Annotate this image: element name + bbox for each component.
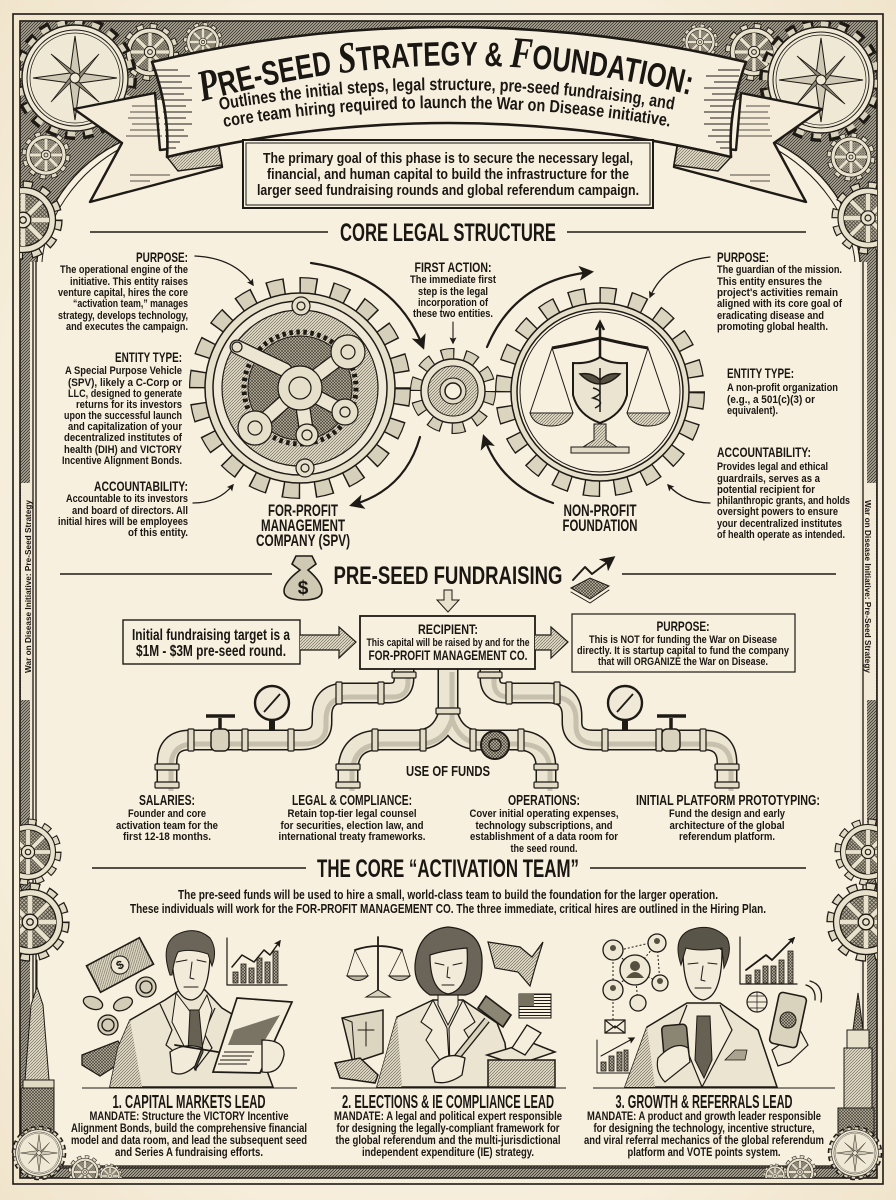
left text column: for-profit details [58,249,188,539]
text box: recipient [360,616,535,669]
icon: money bag: $ [298,578,309,599]
title text: PRE-SEED STRATEGY & FOUNDATION: [198,38,692,102]
jacket [625,1003,777,1087]
role: capital markets lead [71,1092,307,1159]
hair [415,927,482,995]
accountability right: potential recipient for [717,484,816,496]
role: capital markets lead: and Series A fundraising efforts. [115,1145,263,1159]
primary goal box: larger seed fundraising rounds and global referendum campaign. [257,182,639,199]
arrow: recipient to purpose [535,627,568,658]
icon: flag [519,994,551,1018]
hand [432,1056,465,1083]
use of funds: initial platform prototyping: referendum platform. [679,831,775,843]
first action text [410,259,496,320]
callout arrows [193,256,710,503]
inner toothed wheel [244,332,356,444]
right text column: non-profit details [717,249,850,541]
jacket [377,1000,510,1087]
icon: money bag [284,556,322,600]
large gear: for-profit management company [198,286,402,490]
purpose left: PURPOSE: [136,249,188,265]
entity type left: Incentive Alignment Bonds. [62,455,182,467]
team baseline rules [82,1087,835,1089]
label: non-profit foundation: FOUNDATION [562,516,638,535]
entity type right: ENTITY TYPE: [727,365,794,381]
bottom gears [68,1155,817,1178]
face [172,942,210,1000]
purpose right: aligned with its core goal of [717,298,842,310]
accountability left: of this entity. [128,527,188,539]
phone left with hand [657,1024,690,1082]
accountability right: Provides legal and ethical [717,461,828,473]
scales of justice [530,322,670,453]
purpose right: promoting global health. [717,321,828,333]
shirt and tie [172,993,212,1070]
side text right: War on Disease Initiative: Pre-Seed Strategy [863,500,873,673]
hair [678,927,729,968]
entity type right [727,365,838,417]
icon: referral network [603,934,668,1020]
entity type left: and capitalization of your [68,421,183,433]
entity type left: upon the successful launch [64,410,182,422]
purpose right [717,249,842,333]
entity type left: decentralized institutes of [64,432,182,444]
purpose left: and executes the campaign. [66,321,188,333]
entity type right: (e.g., a 501(c)(3) or [727,394,816,406]
pipe valves and gauges [206,686,686,759]
accountability right [717,444,850,541]
role: growth and referrals lead: 3. GROWTH & REFERRALS LEAD [616,1092,792,1112]
gear flow arrows [311,263,591,505]
use of funds: operations: the seed round. [510,843,578,855]
ribbon end hatching [156,70,740,148]
role: growth and referrals lead: platform and VOTE points system. [628,1145,780,1159]
accountability right: guardrails, serves as a [717,473,821,485]
role: growth and referrals lead: for designing the technology, incentive structure, [594,1121,814,1135]
role: elections and compliance lead: independent expenditure (IE) strategy. [362,1145,534,1159]
purpose left: strategy, develops technology, [58,310,188,322]
pipes: use of funds [155,668,739,791]
use of funds: operations: technology subscriptions, and [476,820,612,832]
text box: purpose [572,614,795,672]
first action text: FIRST ACTION: [414,259,492,275]
text box: purpose: directly. It is startup capital to fund the company [577,645,790,657]
role: capital markets lead: MANDATE: Structure the VICTORY Incentive [90,1109,289,1123]
icon: coins [82,977,156,1035]
role: elections and compliance lead: for designing the legally-compliant framework for [336,1121,560,1135]
arrow: down into recipient [437,590,459,612]
accountability left: and board of directors. All [72,505,188,517]
accountability right: ACCOUNTABILITY: [717,444,811,460]
purpose right: This entity ensures the [717,276,822,288]
heading: the core activation team: THE CORE “ACTIVATION TEAM” [317,855,579,883]
use of funds: salaries: activation team for the [116,820,218,832]
small center gear [416,354,490,428]
heading: core legal structure: CORE LEGAL STRUCTURE [340,219,556,247]
role: elections and compliance lead [334,1092,562,1159]
label: for-profit management company: MANAGEMENT [261,516,345,535]
role: capital markets lead: 1. CAPITAL MARKETS LEAD [112,1092,266,1112]
primary goal box: financial, and human capital to build the infrastructure for the [267,166,629,183]
accountability right: oversight powers to ensure [717,506,838,518]
icon: envelope [605,1020,625,1033]
use of funds: legal and compliance [278,793,426,843]
entity type left: LLC, designed to generate [68,388,182,400]
hair [166,931,215,975]
phone right with hand [769,981,822,1066]
purpose left: initiative. This entity raises [70,276,188,288]
use of funds: salaries: first 12-18 months. [123,831,211,843]
first action text: these two entities. [413,308,493,320]
role: elections and compliance lead: the global referendum and the multi-jurisdictional [336,1133,560,1147]
accountability right: of health operate as intended. [717,529,845,541]
purpose right: eradicating disease and [717,310,824,322]
entity type right: equivalent). [727,405,778,417]
use of funds: salaries [116,793,218,843]
obelisk tower left [21,960,54,1133]
purpose left [58,249,188,333]
role: growth and referrals lead [584,1092,824,1159]
text box: purpose: PURPOSE: [656,618,710,634]
title ribbon [72,26,824,204]
right ribbon tail [674,93,822,202]
primary goal box: The primary goal of this phase is to secure the necessary legal, [263,150,633,167]
use of funds: legal and compliance: Retain top-tier legal counsel [288,808,416,820]
corner ornaments: gears and compasses [0,20,896,957]
use of funds: operations: OPERATIONS: [508,793,580,809]
use of funds: legal and compliance: LEGAL & COMPLIANCE: [292,793,412,809]
accountability left: initial hires will be employees [58,516,188,528]
role: capital markets lead: Alignment Bonds, build the comprehensive financial [71,1121,307,1135]
accountability left: Accountable to its investors [66,493,188,505]
first action text: incorporation of [418,297,488,309]
icon: law book [335,1010,383,1083]
text box: purpose: This is NOT for funding the War on Disease [589,634,777,646]
icon: cash with rising arrow [571,558,613,603]
right gear: non-profit foundation [504,296,696,488]
entity type left: health (DIH) and VICTORY [64,444,183,456]
invisible guide paths [200,65,694,102]
entity type left [62,349,183,467]
use of funds: initial platform prototyping: INITIAL PLATFORM PROTOTYPING: [636,793,820,809]
bottom compass left [13,1127,65,1179]
ribbon main band [152,27,746,157]
use of funds: initial platform prototyping: Fund the design and early [669,808,786,820]
purpose right: The guardian of the mission. [717,264,842,276]
text box: recipient: RECIPIENT: [418,621,478,637]
pipe flanges [155,672,739,788]
label: use of funds: USE OF FUNDS [406,763,490,780]
subtitle line 2: core team hiring required to launch the War on Disease initiative. [224,95,670,126]
figure: elections and compliance lead [335,927,555,1087]
purpose right: project's activities remain [717,287,838,299]
use of funds: initial platform prototyping: architecture of the global [670,820,784,832]
text box: fundraising target: Initial fundraising target is a [132,627,290,644]
accountability left [58,478,188,539]
primary goal box [243,140,653,208]
icon: bar chart [227,938,287,985]
entity type left: A Special Purpose Vehicle [65,365,182,377]
purpose right: PURPOSE: [717,249,769,265]
role: growth and referrals lead: MANDATE: A product and growth leader responsible [587,1109,821,1123]
entity type left: (SPV), likely a C-Corp or [68,377,183,389]
subtitle line 1: Outlines the initial steps, legal structure, pre-seed fundraising, and [219,78,675,110]
icon: scales [347,937,410,997]
activation team intro text: The pre-seed funds will be used to hire a small, world-class team to build the foundation for the larger operation. [178,888,718,902]
ribbon folds [126,106,772,181]
hands [170,1040,284,1074]
purpose left: The operational engine of the [60,264,188,276]
left ribbon tail [74,93,222,202]
icon: globe [747,992,767,1012]
icon: cash stack [82,1041,128,1076]
role: growth and referrals lead: and viral referral mechanics of the global referendum [584,1133,824,1147]
icon: top chart [740,937,797,984]
first action text: The immediate first [410,274,496,286]
icon: dollar bill: $ [114,957,127,973]
skyscraper tower right [838,993,874,1136]
purpose left: venture capital, hires the core [58,287,188,299]
label: for-profit management company [256,501,350,550]
jacket [110,990,273,1087]
entity type left: ENTITY TYPE: [115,349,182,365]
accountability left: ACCOUNTABILITY: [94,478,188,494]
figure: growth and referrals lead [597,927,822,1087]
text box: purpose: that will ORGANIZE the War on Disease. [598,656,768,668]
role: capital markets lead: model and data room, and lead the subsequent seed [71,1133,307,1147]
icon: dollar bill [86,938,154,992]
side text left: War on Disease Initiative: Pre-Seed Strategy [23,500,33,673]
accountability right: philanthropic grants, and holds [717,495,850,507]
use of funds: initial platform prototyping [636,793,820,843]
icon: small chart [597,1038,634,1073]
use of funds: legal and compliance: international treaty frameworks. [278,831,426,843]
role: elections and compliance lead: 2. ELECTIONS & IE COMPLIANCE LEAD [342,1092,554,1112]
face [683,943,722,1000]
use of funds: operations: Cover initial operating expenses, [470,808,618,820]
mechanism satellites [232,297,365,477]
use of funds: salaries: Founder and core [128,808,206,820]
use of funds: operations [470,793,619,855]
shield with caduceus [573,357,627,423]
use of funds: operations: establishment of a data room for [470,831,619,843]
face [430,948,467,994]
entity type right: A non-profit organization [727,382,838,394]
bottom compass right [829,1127,881,1179]
mechanism arms [237,347,348,435]
text box: fundraising target [123,620,300,664]
label: for-profit management company: COMPANY (SPV) [256,531,350,550]
label: non-profit foundation [562,501,638,535]
text box: recipient: FOR-PROFIT MANAGEMENT CO. [368,647,528,663]
icon: us map [488,942,543,986]
first action text: step is the legal [418,286,488,298]
entity type left: returns for its investors [76,399,182,411]
accountability right: your decentralized institutes [717,518,842,530]
ballot box [487,1025,555,1087]
report sheet [213,998,292,1073]
activation team intro text [130,888,766,916]
label: non-profit foundation: NON-PROFIT [564,501,637,520]
text box: fundraising target: $1M - $3M pre-seed round. [136,643,286,660]
text box: recipient: This capital will be raised by and for the [366,637,530,649]
use of funds: legal and compliance: for securities, election law, and [280,820,424,832]
use of funds: salaries: SALARIES: [139,793,195,809]
arrow: target to recipient [300,627,356,658]
figure: capital markets lead [82,931,292,1087]
heading: pre-seed fundraising: PRE-SEED FUNDRAISING [334,562,562,590]
gavel [445,1020,487,1072]
label: for-profit management company: FOR-PROFIT [268,501,338,520]
purpose left: “activation team,” manages [73,298,188,310]
role: elections and compliance lead: MANDATE: A legal and political expert responsible [334,1109,562,1123]
